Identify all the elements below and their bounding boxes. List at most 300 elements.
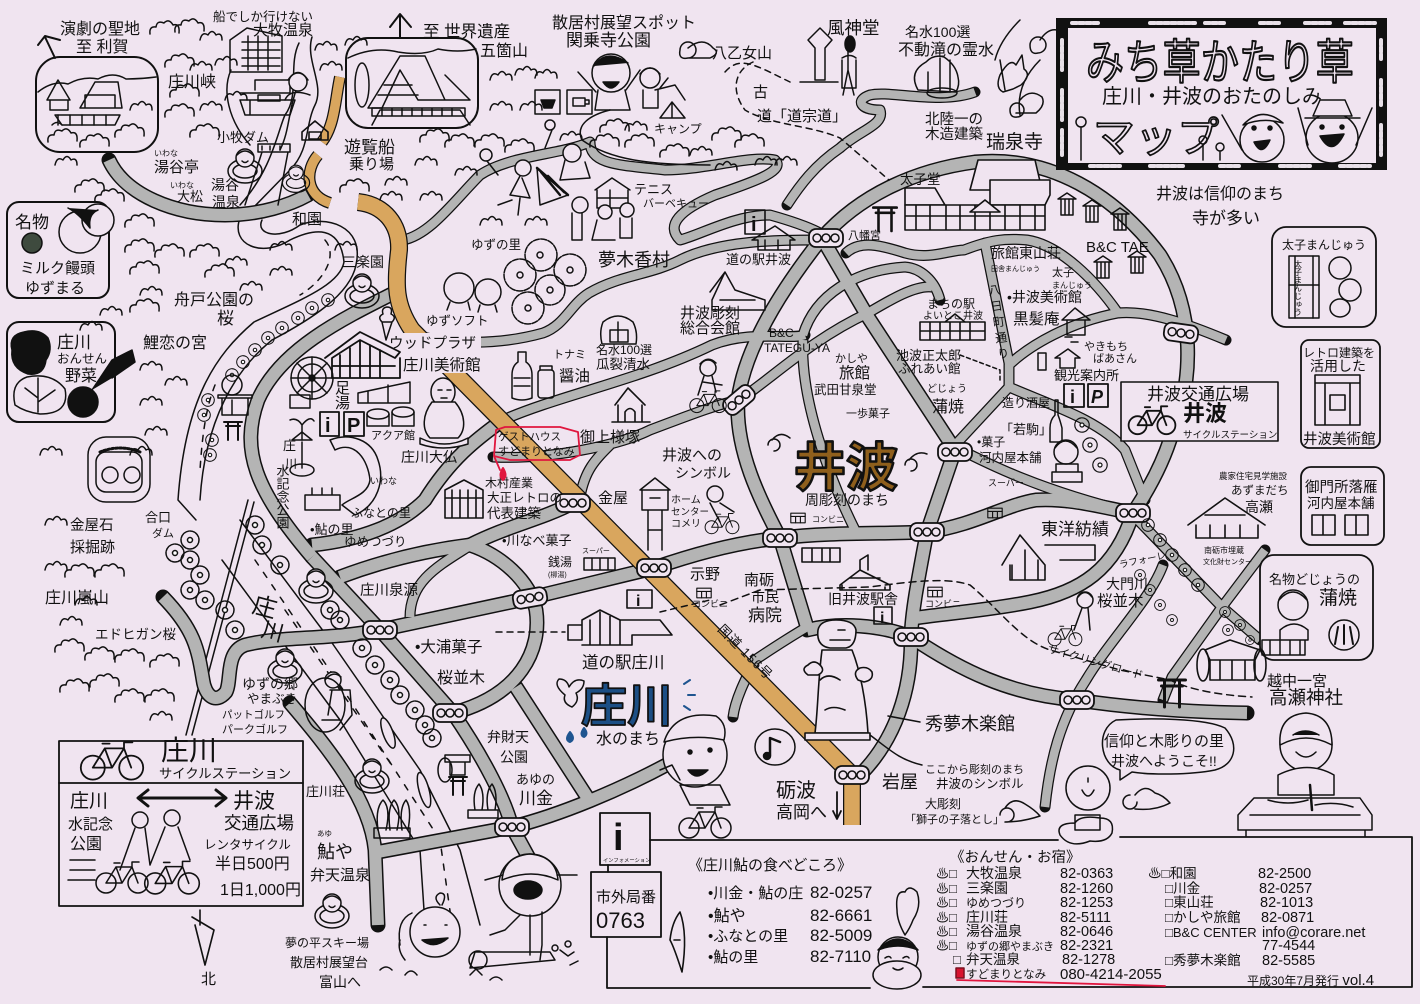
- text: 醤油: 醤油: [559, 367, 590, 385]
- text: 岩屋: 岩屋: [882, 772, 918, 792]
- list: lodgings right names: □秀夢木楽館: [1165, 953, 1241, 968]
- icon: tourism parking sign: P: [1091, 387, 1104, 407]
- text: 舟戸公園の: 舟戸公園の: [174, 291, 254, 309]
- text: 水記念: 水記念: [68, 816, 113, 833]
- text: 一歩菓子: 一歩菓子: [846, 406, 890, 420]
- text: ゆめつづり: ゆめつづり: [344, 535, 407, 549]
- icon: cyclist at Komeri: [705, 486, 739, 534]
- text: あゆ: あゆ: [317, 829, 332, 838]
- text: 周彫刻のまち: 周彫刻のまち: [805, 492, 889, 508]
- icon: fountain and blue water drops: [557, 679, 695, 742]
- text: 蒲焼: 蒲焼: [932, 398, 964, 416]
- river: 庄川 lower course: [186, 500, 480, 925]
- text: 井波美術館: 井波美術館: [1303, 431, 1376, 448]
- list: lodgings right phones: info@corare.net: [1262, 925, 1365, 941]
- text: 井波交通広場: 井波交通広場: [1147, 385, 1249, 404]
- icon: dam: [245, 144, 290, 205]
- icon: Taisho retro building: [445, 480, 483, 518]
- icon: Michi-no-eki Shogawa info sign: i: [636, 593, 640, 610]
- text: ホーム: ホーム: [671, 494, 701, 506]
- heading: ayu restaurants: 《庄川鮎の食べどころ》: [688, 857, 852, 874]
- text: 旧井波駅舎: 旧井波駅舎: [828, 591, 898, 607]
- list: ayu restaurant phones: [810, 883, 872, 966]
- text: 病院: 病院: [748, 606, 782, 625]
- text: 文化財センター: 文化財センター: [1203, 557, 1252, 566]
- icon: second hiker: [640, 68, 668, 108]
- text: 井波彫刻: 井波彫刻: [680, 305, 740, 322]
- text: どじょう: どじょう: [927, 383, 967, 395]
- list: ayu restaurant names: •ふなとの里: [708, 928, 788, 945]
- text: TATEGU-YA: TATEGU-YA: [764, 341, 830, 355]
- arrow: between Shogawa and Inami: [138, 790, 226, 806]
- text: 庄川大仏: 庄川大仏: [401, 449, 457, 465]
- text: いわな: いわな: [170, 181, 194, 190]
- icon: onsen Sanrakuen bather: [345, 274, 379, 308]
- text: 越中一宮: 越中一宮: [1267, 673, 1327, 690]
- text: 大正レトロの: 大正レトロの: [487, 491, 562, 505]
- list: lodgings left names: ♨□: [936, 924, 957, 939]
- text: トナミ: トナミ: [553, 348, 586, 361]
- text: あゆの: あゆの: [516, 772, 555, 787]
- list: lodgings left names: 湯谷温泉: [966, 923, 1022, 939]
- icon: bathers at Yutani: [228, 149, 310, 192]
- icon: sake bottle: [1050, 400, 1062, 442]
- icon: supermarket: [584, 558, 615, 570]
- leader line to Hidemu hall: [888, 716, 920, 722]
- icon: road-side info sign: i: [751, 214, 757, 236]
- text: よいとこ井波: よいとこ井波: [923, 309, 983, 322]
- text: 桜: 桜: [217, 309, 234, 328]
- list: lodgings right names: □B&C CENTER: [1165, 925, 1257, 940]
- text: アクア館: アクア館: [371, 429, 415, 442]
- text: 旅館: 旅館: [839, 364, 870, 382]
- text: 南砺市埋蔵: 南砺市埋蔵: [1204, 545, 1244, 555]
- text: テニス: テニス: [634, 182, 673, 197]
- text: 井波美術館: •井波美術館: [1007, 289, 1082, 305]
- text: ウッドプラザ: ウッドプラザ: [389, 335, 476, 352]
- text: 庄川泉源: 庄川泉源: [360, 582, 418, 599]
- text: 庄川 water town logo: 庄川: [581, 680, 673, 732]
- icon: old Inami station building: [840, 555, 890, 590]
- labels: east: [692, 478, 1343, 826]
- landmark: Kanjoji park with campers: [535, 14, 716, 165]
- text: レンタサイクル: レンタサイクル: [204, 838, 291, 852]
- text: 湯谷亭: 湯谷亭: [154, 158, 199, 176]
- text: 造り酒屋: 造り酒屋: [1002, 396, 1050, 410]
- list: lodgings left names: 弁天温泉: [966, 951, 1020, 967]
- icon: cheering man with hat: [1298, 100, 1372, 163]
- icon: yuzu characters: [444, 273, 501, 312]
- text: 公園: 公園: [500, 749, 528, 765]
- cherry trees south-west: [166, 516, 441, 747]
- text: 至 利賀: 至 利賀: [76, 38, 128, 56]
- forest tufts: [40, 19, 797, 720]
- text: 三楽園: 三楽園: [342, 254, 384, 270]
- icon: ayu fish: [670, 912, 685, 972]
- icon: grilled ayu skewers: [374, 784, 498, 838]
- text: コンビニ: コンビニ: [925, 599, 961, 609]
- list: lodgings left phones: 82-1260: [1060, 881, 1113, 897]
- cherry trees along upper river: [198, 294, 334, 461]
- text: 風神堂: 風神堂: [827, 18, 880, 38]
- text: 大彫刻: 大彫刻: [925, 797, 961, 811]
- text: 採掘跡: 採掘跡: [70, 539, 115, 556]
- hand-added red guesthouse marker: [494, 427, 580, 480]
- text: いわな: いわな: [370, 476, 397, 486]
- list: lodgings left names: ゆずの郷やまぶき: [966, 939, 1054, 953]
- text: ゲストハウス: ゲストハウス: [498, 431, 561, 443]
- list: lodgings right phones: [1258, 866, 1365, 969]
- text: 川なべ菓子: •川なべ菓子: [502, 533, 572, 548]
- text: 不動滝の霊水: 不動滝の霊水: [898, 41, 994, 59]
- text: 名物どじょうの: 名物どじょうの: [1269, 572, 1360, 587]
- text: 金屋: 金屋: [598, 490, 628, 507]
- text: 道の駅井波: 道の駅井波: [726, 252, 791, 267]
- icon: Benzaiten shrine: [438, 755, 470, 795]
- panel: to Gokayama world heritage: [346, 38, 478, 128]
- text: 鮎や: 鮎や: [317, 842, 353, 862]
- text: 温泉: 温泉: [212, 194, 240, 210]
- text: 桜並木: 桜並木: [437, 669, 485, 687]
- text: 御上様塚: 御上様塚: [580, 429, 640, 446]
- panel: to Toga: [36, 57, 158, 152]
- text: 0763: 0763: [596, 908, 645, 933]
- icon: Yaotome mountain and dashed old road: [725, 62, 889, 180]
- text: コメリ: コメリ: [671, 519, 701, 530]
- icon: dragon: [995, 20, 1040, 115]
- text: 庄川: 庄川: [57, 333, 91, 352]
- text: 半日500円: 半日500円: [215, 855, 290, 873]
- icon: water memorial park statue: [283, 419, 314, 476]
- list: lodgings left phones: 080-4214-2055: [1060, 966, 1162, 983]
- text: 河内屋本舗: 河内屋本舗: [979, 451, 1042, 465]
- text: 足: 足: [335, 380, 350, 397]
- text: ここから彫刻のまち: ここから彫刻のまち: [925, 762, 1024, 776]
- icon: gate shrine: [612, 388, 650, 422]
- text: 桜並木: 桜並木: [1097, 592, 1144, 610]
- text: 1日1,000円: 1日1,000円: [220, 882, 301, 899]
- text: 旅館東山荘: 旅館東山荘: [991, 245, 1061, 261]
- icon: old station info sign: [874, 607, 892, 627]
- text: 若駒: 「若駒」: [1000, 422, 1052, 437]
- icon: golfer: [305, 672, 352, 732]
- icon: log and grass: [380, 941, 578, 980]
- labels: Inami town: [726, 185, 1284, 644]
- arrow: south to Takaoka: [833, 792, 841, 819]
- list: lodgings right phones: 82-2500: [1258, 866, 1311, 882]
- icon: road-side info sign: [745, 210, 765, 236]
- icon: music note bubble: [755, 729, 795, 765]
- text: 南砺: 南砺: [744, 572, 774, 589]
- list: ayu restaurant phones: 82-7110: [810, 947, 871, 966]
- list: lodgings right names: [1148, 866, 1257, 968]
- icon: michi-no-eki Inami building: [752, 226, 795, 250]
- text: 道の駅庄川: 道の駅庄川: [582, 653, 664, 672]
- text: B&amp;C: B&C: [769, 326, 794, 340]
- arrow to Gokayama: [390, 14, 411, 38]
- national route 156 orange fill: [358, 202, 852, 825]
- text: 弁財天: 弁財天: [487, 729, 529, 745]
- text: 庄川荘: 庄川荘: [306, 784, 345, 799]
- labels: central: [445, 272, 765, 748]
- icon: roofed temples: [1058, 193, 1146, 278]
- title block: [1056, 18, 1387, 170]
- text: 示野: 示野: [690, 566, 720, 583]
- icon: carp shrine: [218, 375, 252, 440]
- text: かしや: かしや: [835, 352, 868, 365]
- icon: Shogawa great Buddha: [420, 378, 468, 448]
- list: lodgings left names: ♨□: [936, 910, 957, 925]
- icon: tourism parking sign: [1088, 384, 1108, 407]
- icon: sculpture hall: [710, 272, 765, 310]
- icon: foot bath building: [358, 382, 410, 403]
- dashed link to road station: [496, 600, 710, 632]
- text: 夢の平スキー場: 夢の平スキー場: [285, 936, 369, 950]
- text: 御門所落雁: 御門所落雁: [1305, 479, 1378, 496]
- text: ふなとの里: ふなとの里: [351, 506, 411, 520]
- heading: onsen and inns: 《おんせん・お宿》: [950, 849, 1080, 866]
- list: lodgings left names: ♨□: [936, 866, 957, 881]
- text: 庄川嵐山: 庄川嵐山: [45, 589, 109, 607]
- icon: Kurokamian house: [1062, 308, 1090, 342]
- text: ゆずの郷: ゆずの郷: [242, 676, 298, 692]
- icon: cheering girl: [1222, 114, 1284, 162]
- arrow to Toga: [38, 36, 60, 58]
- list: lodgings left phones: 82-0363: [1060, 866, 1113, 882]
- text: 庄川 on river: 庄: [249, 592, 280, 624]
- icon: spring shrine: [601, 316, 637, 344]
- welcome speech bubble: [1102, 719, 1234, 780]
- icon: Fudo waterfall rock: [914, 56, 959, 98]
- text: 木村産業: 木村産業: [485, 476, 533, 490]
- text: 太子堂: 太子堂: [900, 172, 940, 187]
- character: onsen mascot with steam: [873, 888, 921, 989]
- text: 名水100選: 名水100選: [905, 24, 970, 40]
- text: 大牧温泉: 大牧温泉: [253, 22, 313, 39]
- list: lodgings right phones: 82-0871: [1261, 910, 1314, 926]
- text: レトロ建築を: レトロ建築を: [1303, 345, 1375, 360]
- list: lodgings left names: すどまりとなみ: [966, 968, 1046, 981]
- icon: cyclist near shrine: [690, 359, 726, 413]
- text: 河内屋本舗: 河内屋本舗: [1307, 496, 1374, 511]
- icon: soft cream: [380, 307, 394, 340]
- text: 交通広場: 交通広場: [224, 813, 294, 833]
- text: 演劇の聖地: 演劇の聖地: [60, 20, 140, 38]
- list: lodgings right phones: 82-1013: [1260, 895, 1313, 911]
- icon: smiling hiker: [578, 54, 640, 110]
- panel: Shogawa cycle station: [59, 735, 303, 906]
- text: スーパー: スーパー: [582, 547, 610, 555]
- text: 瑞泉寺: 瑞泉寺: [986, 131, 1043, 153]
- text: スーパー: スーパー: [988, 478, 1024, 488]
- text: 北: 北: [201, 971, 216, 988]
- upper route fill: [309, 77, 340, 203]
- list: ayu restaurant phones: 82-6661: [810, 906, 872, 925]
- list: lodgings right phones: 82-0257: [1259, 881, 1312, 897]
- text: 八乙女山: 八乙女山: [712, 45, 772, 62]
- text: みち草かたり草: みち草かたり草: [1086, 37, 1354, 90]
- text: 弁天温泉: 弁天温泉: [310, 867, 370, 884]
- road network: gray fill medium roads: [403, 92, 1265, 807]
- text: 代表建築: 代表建築: [487, 506, 541, 521]
- national route 156 orange casing: [358, 202, 852, 825]
- text: 活用した: 活用した: [1310, 358, 1366, 374]
- panel: Kawachiya rakugan: [1301, 467, 1384, 545]
- text: ダム: ダム: [152, 526, 174, 540]
- text: エドヒガン桜: エドヒガン桜: [95, 627, 176, 642]
- text: いわな: いわな: [154, 149, 178, 158]
- list: lodgings left phones: 82-5111: [1060, 910, 1111, 926]
- icon: Michi-no-eki Shogawa info sign: [627, 590, 652, 610]
- icon: machi-no-eki building: [920, 314, 985, 340]
- text: 大浦菓子: •大浦菓子: [415, 638, 482, 656]
- text: 市民: 市民: [751, 589, 779, 605]
- upper route casing: [309, 77, 340, 203]
- list: lodgings left names: 大牧温泉: [966, 865, 1022, 881]
- text: 銭湯: 銭湯: [548, 554, 572, 569]
- icon: S-shaped water slide: [330, 437, 381, 515]
- icon: hotel and boat at dam: [230, 28, 310, 115]
- icon: museum: [325, 332, 400, 378]
- text: 川 on river: 川: [259, 617, 286, 647]
- text: 北陸一の: 北陸一の: [925, 111, 983, 128]
- bottom directory box: [591, 813, 1412, 989]
- text: 池波正太郎: 池波正太郎: [896, 348, 961, 363]
- camp hill line: [580, 110, 710, 165]
- list: ayu restaurant names: •鮎や: [708, 907, 746, 925]
- icon: yuzu trees: [504, 239, 586, 324]
- icon: two cyclists: [68, 810, 199, 894]
- text: 富山へ: 富山へ: [319, 974, 361, 990]
- river: upper course and gorge: [178, 37, 357, 520]
- text: マップ: マップ: [1093, 114, 1219, 161]
- list: lodgings right phones: 77-4544: [1262, 938, 1315, 954]
- text: ふれあい館: ふれあい館: [898, 362, 961, 376]
- list: lodgings left names: ♨□: [936, 938, 957, 953]
- landmark: Shogawa art museum and wood plaza: [274, 332, 481, 537]
- text: 獅子の子落とし: 「獅子の子落とし」: [905, 812, 1004, 826]
- text: 蒲焼: 蒲焼: [1319, 587, 1357, 609]
- text: 関乗寺公園: 関乗寺公園: [566, 31, 651, 50]
- icon: tourism info sign: [1064, 384, 1084, 407]
- icon: parking sign: [344, 412, 364, 437]
- icon: parking sign: P: [347, 415, 360, 437]
- route label 国道156号: 国道 156号: [715, 622, 776, 683]
- panel: Taishi manju: [1272, 227, 1376, 327]
- text: 井波への: 井波への: [662, 447, 722, 464]
- text: 太子: 太子: [1052, 266, 1074, 279]
- text: ミルク饅頭: ミルク饅頭: [20, 260, 95, 277]
- text: ゆずソフト: ゆずソフト: [426, 314, 489, 328]
- panel: souvenir meibutsu: [7, 202, 114, 298]
- text: 船でしか行けない: 船でしか行けない: [213, 10, 313, 24]
- icon: tent: [655, 85, 685, 118]
- icon: road station Shogawa building: [568, 610, 672, 645]
- road network: black casing: [109, 160, 1247, 925]
- landmark: tennis and barbecue: [480, 120, 709, 240]
- labels: north-west: [60, 10, 528, 352]
- character: carver at workbench: [1238, 713, 1372, 836]
- text: 川金: 川金: [519, 789, 553, 808]
- text: コンビニ: コンビニ: [812, 515, 844, 524]
- text: パットゴルフ: パットゴルフ: [222, 708, 285, 721]
- text: ゆずまる: ゆずまる: [25, 280, 85, 297]
- icon: convenience stores: [697, 508, 1002, 598]
- list: lodgings left phones: 82-1278: [1062, 952, 1115, 968]
- list: lodgings left names: [936, 865, 1054, 981]
- list: lodgings right names: □川金: [1165, 881, 1201, 896]
- text: 井波: 井波: [1183, 401, 1227, 426]
- icon: tourism info sign: i: [1070, 387, 1075, 407]
- text: 庄川美術館: 庄川美術館: [403, 356, 481, 374]
- icon: clouds near mascot: [1000, 788, 1170, 822]
- panel: Kinya stone: [88, 437, 150, 502]
- text: 大門川: 大門川: [1106, 576, 1148, 592]
- text: 夢木香村: 夢木香村: [598, 250, 670, 270]
- icon: symbol tower: [640, 478, 670, 550]
- list: lodgings left phones: 82-1253: [1060, 895, 1113, 911]
- text: 湯谷: 湯谷: [211, 177, 239, 193]
- icon: cherry trees by Inami road: [1075, 418, 1254, 644]
- list: lodgings left phones: 82-0646: [1060, 924, 1113, 940]
- traffic signals: [363, 229, 1199, 836]
- labels: south-west: [45, 510, 555, 990]
- text: 庄川・井波のおたのしみ: 庄川・井波のおたのしみ: [1102, 85, 1322, 108]
- text: 黒髪庵: 黒髪庵: [1013, 310, 1060, 328]
- list: lodgings right names: □東山荘: [1165, 895, 1214, 910]
- list: ayu restaurant names: •川金・鮎の庄: [708, 885, 803, 902]
- icon: temple halls: [905, 160, 1050, 230]
- wood grain title: 井波: 井波: [794, 440, 898, 498]
- list: lodgings left names: ♨□: [936, 895, 957, 910]
- list: lodgings right phones: 82-5585: [1262, 953, 1315, 969]
- list: lodgings left phones: [1060, 866, 1162, 983]
- text: サイクルステーション: サイクルステーション: [1183, 430, 1277, 441]
- icon: cloud: [680, 42, 716, 58]
- info sign: [600, 813, 650, 865]
- icon: lion dance carving statue: [804, 620, 872, 740]
- text: 高瀬神社: 高瀬神社: [1269, 687, 1343, 708]
- text: 井波: 井波: [233, 790, 275, 813]
- text: 八幡宮: 八幡宮: [848, 228, 881, 242]
- text: インフォメーション: インフォメーション: [603, 857, 650, 864]
- text: 遊覧船: 遊覧船: [344, 138, 395, 157]
- text: 市外局番: 市外局番: [596, 889, 656, 906]
- icon: torii on south east road: [1158, 680, 1186, 707]
- text: 古: 古: [753, 84, 768, 101]
- text: 鮎の里: •鮎の里: [310, 522, 354, 537]
- text: 金屋石: 金屋石: [70, 517, 114, 534]
- icon: kawachiya shop man: [1052, 440, 1082, 482]
- list: lodgings left names: 庄川荘: [966, 909, 1008, 925]
- icon: onsen bathers south-west: [268, 569, 389, 928]
- leader line to symbol: [870, 735, 922, 765]
- icon: hospital building: [802, 548, 840, 562]
- info sign: i: [613, 817, 624, 859]
- list: lodgings left phones: 82-2321: [1060, 938, 1113, 954]
- text: 湯: 湯: [335, 395, 350, 412]
- text: まちの駅: まちの駅: [927, 297, 975, 311]
- text: 公園: 公園: [70, 835, 102, 853]
- character: round mascot on cloud: [1059, 766, 1112, 844]
- text: 武田甘泉堂: 武田甘泉堂: [814, 382, 877, 397]
- text: 水記念公園 vertical: 水記念公園: [274, 464, 290, 529]
- character: kid on bike with helmet: [660, 715, 731, 838]
- text: 合口: 合口: [145, 510, 171, 525]
- list: lodgings left names: ♨□: [936, 881, 957, 896]
- red checkbox: [956, 968, 964, 978]
- text: 柳湯: (柳湯): [548, 570, 567, 579]
